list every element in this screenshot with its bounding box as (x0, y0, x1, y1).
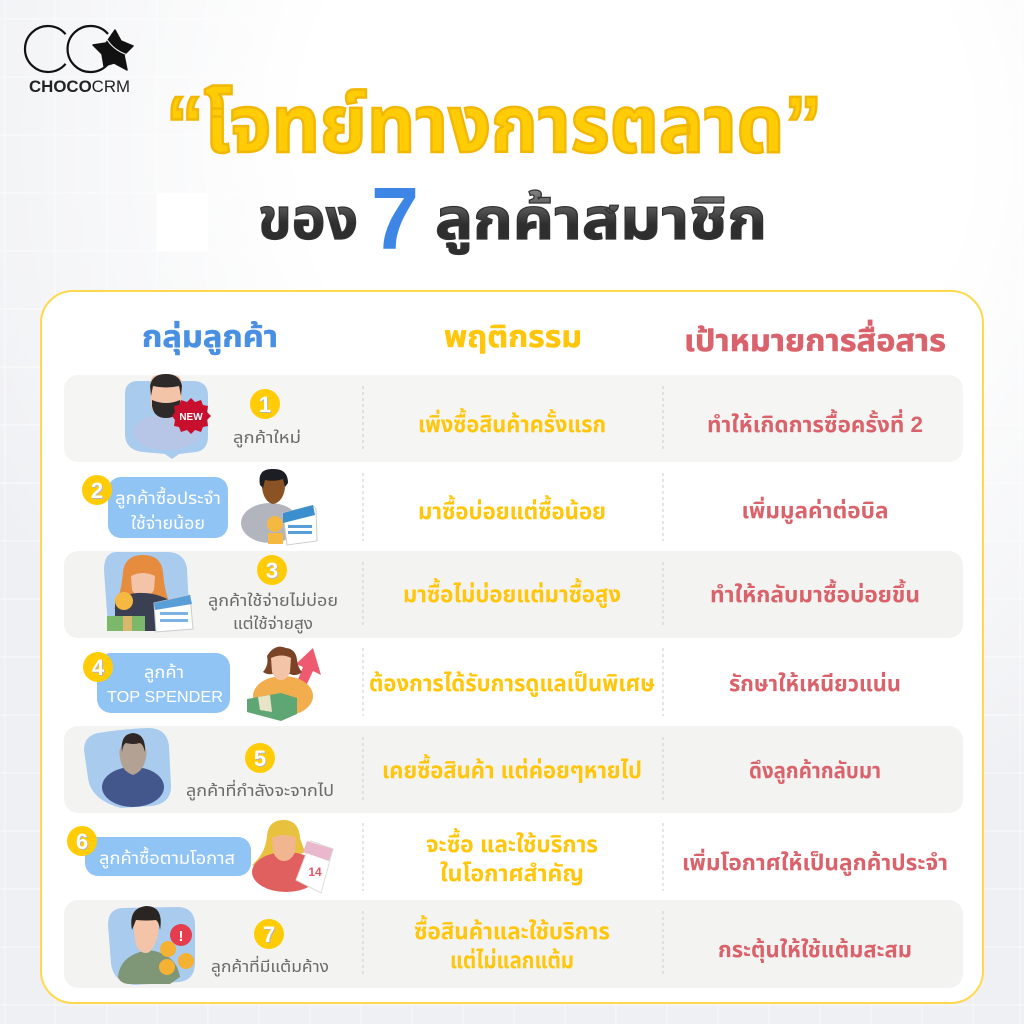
row 1 (64, 374, 963, 462)
number badge 3 (257, 555, 287, 585)
behaviour 4: ต้องการได้รับการดูแลเป็นพิเศษ (369, 670, 655, 697)
number badge 2 (82, 475, 112, 505)
goal 6: เพิ่มโอกาศให้เป็นลูกค้าประจำ (682, 848, 948, 876)
icon: unredeemed points (108, 906, 195, 985)
icon: new customer (125, 374, 211, 459)
label pill: occasional buyer (85, 837, 251, 876)
behaviour 2: มาซื้อบ่อยแต่ซื้อน้อย (418, 495, 606, 524)
icon: unredeemed points: ! (178, 928, 184, 945)
behaviour 7: ซื้อสินค้าและใช้บริการ (414, 915, 610, 944)
subtitle: 7 (371, 169, 419, 268)
label pill: top spender: ลูกค้า (144, 662, 184, 684)
behaviour 3: มาซื้อไม่บ่อยแต่มาซื้อสูง (403, 578, 621, 608)
title: main heading: “โจทย์ทางการตลาด” (166, 80, 822, 169)
row 6 (67, 820, 948, 893)
goal 3: ทำให้กลับมาซื้อบ่อยขึ้น (710, 579, 920, 607)
label pill: occasional buyer: ลูกค้าซื้อตามโอกาส (99, 846, 235, 870)
row 3 (64, 551, 963, 638)
icon: occasional buyer: 14 (308, 865, 322, 879)
label pill: regular low spend: ลูกค้าซื้อประจำ (115, 486, 221, 510)
number badge 7: 7 (263, 922, 275, 947)
goal 1: ทำให้เกิดการซื้อครั้งที่ 2 (707, 409, 923, 437)
icon: top spender (247, 647, 321, 721)
behaviour 6 (426, 828, 598, 886)
label: new customer: ลูกค้าใหม่ (233, 429, 301, 447)
row 4 (83, 647, 901, 721)
behaviour 1: เพิ่งซื้อสินค้าครั้งแรก (418, 408, 606, 437)
behaviour 5: เคยซื้อสินค้า แต่ค่อยๆหายไป (382, 754, 642, 783)
behaviour 6: จะซื้อ และใช้บริการ (426, 828, 598, 857)
icon: new customer: NEW (179, 412, 203, 423)
number badge 4 (83, 652, 113, 682)
label: unredeemed points: ลูกค้าที่มีแต้มค้าง (211, 955, 329, 976)
panel: table card (41, 291, 983, 1003)
subtitle: ของ (258, 187, 358, 252)
icon: regular customer (241, 469, 317, 545)
goal 7: กระตุ้นให้ใช้แต้มสะสม (718, 937, 912, 963)
behaviour 7 (414, 915, 610, 973)
number badge 6 (67, 826, 97, 856)
row 2 (82, 469, 888, 545)
icon: occasional buyer (252, 820, 333, 893)
subtitle: ลูกค้าสมาชิก (435, 187, 767, 255)
logo: ChocoCRM (25, 26, 133, 96)
row 7 (64, 900, 963, 988)
number badge 7 (254, 919, 284, 949)
number badge 6: 6 (76, 829, 88, 854)
row 5 (64, 726, 963, 813)
number badge 4: 4 (92, 655, 105, 680)
label pill: top spender: TOP SPENDER (107, 689, 223, 706)
goal 2: เพิ่มมูลค่าต่อบิล (742, 496, 888, 524)
goal 4: รักษาให้เหนียวแน่น (729, 671, 901, 696)
goal 5: ดึงลูกค้ากลับมา (749, 758, 881, 784)
label: infrequent high spender: แต่ใช้จ่ายสูง (233, 615, 313, 633)
number badge 5 (245, 743, 275, 773)
logo: ChocoCRM: CHOCOCRM (29, 78, 130, 96)
number badge 5: 5 (254, 746, 266, 771)
icon: customer leaving (84, 728, 171, 808)
column heading: customer group: กลุ่มลูกค้า (142, 321, 278, 355)
icon: infrequent high spender (104, 552, 193, 632)
column heading: communication goal: เป้าหมายการสื่อสาร (684, 319, 946, 358)
label pill: top spender (97, 653, 230, 713)
label: infrequent high spender (208, 592, 338, 633)
number badge 1 (250, 389, 280, 419)
behaviour 6: ในโอกาศสำคัญ (440, 860, 584, 886)
label: infrequent high spender: ลูกค้าใช้จ่ายไม่บ่อย (208, 592, 338, 610)
label pill: regular low spend (108, 477, 228, 538)
label: customer leaving: ลูกค้าที่กำลังจะจากไป (186, 779, 334, 800)
subtitle (258, 169, 767, 268)
number badge 3: 3 (266, 558, 278, 583)
column heading: behaviour: พฤติกรรม (444, 321, 582, 354)
behaviour 7: แต่ไม่แลกแต้ม (450, 947, 574, 973)
number badge 1: 1 (259, 392, 271, 417)
number badge 2: 2 (91, 478, 103, 503)
label pill: regular low spend: ใช้จ่ายน้อย (131, 513, 205, 533)
